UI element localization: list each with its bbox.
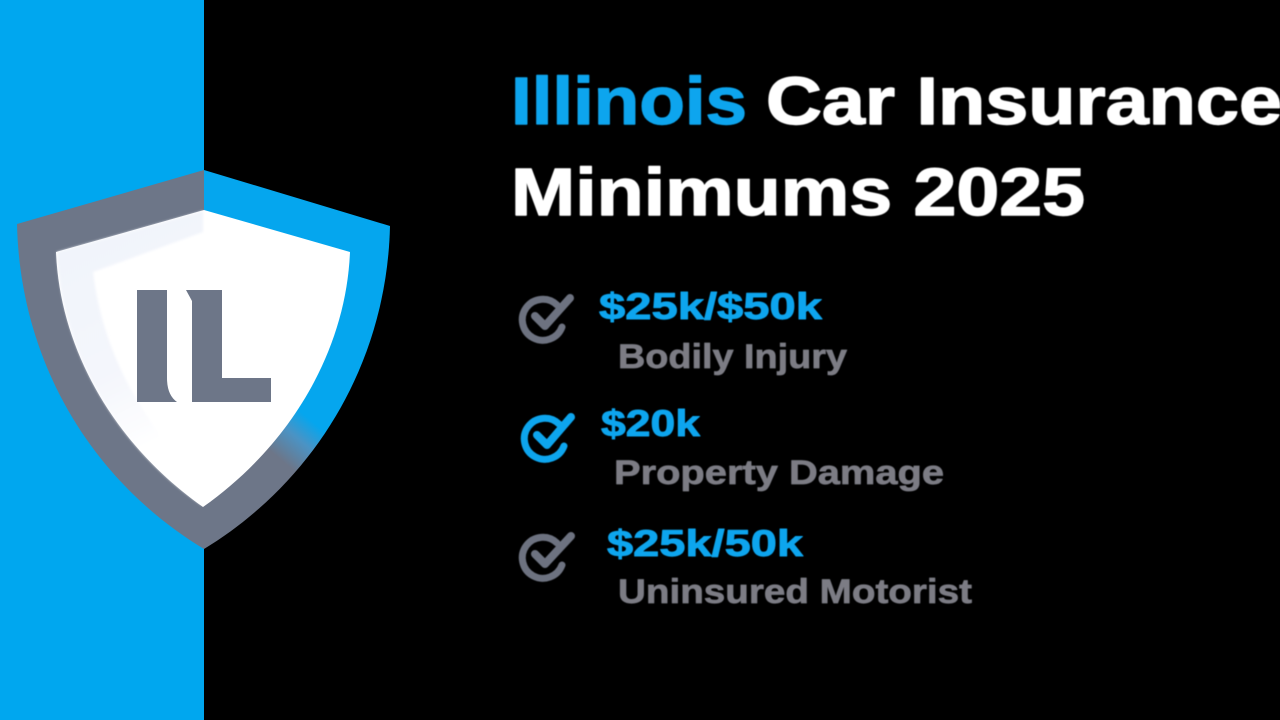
item: bodily injury <box>522 286 847 376</box>
title: Illinois <box>511 64 747 139</box>
amount: $25k/$50k <box>599 286 823 327</box>
icon: shield with IL <box>17 170 390 549</box>
label: Bodily Injury <box>618 338 847 376</box>
title <box>511 64 1280 230</box>
blue side panel <box>0 0 204 720</box>
item: property damage <box>524 403 944 492</box>
title: Minimums 2025 <box>511 155 1085 230</box>
icon: check <box>522 536 571 578</box>
icon: check <box>524 417 571 459</box>
icon: check <box>522 298 570 340</box>
amount: $25k/50k <box>607 523 804 564</box>
item: uninsured motorist <box>522 523 972 611</box>
amount: $20k <box>601 403 701 444</box>
label: Uninsured Motorist <box>618 573 972 611</box>
label: Property Damage <box>614 454 944 492</box>
title: Car Insurance <box>766 64 1280 139</box>
IL monogram <box>137 290 271 402</box>
